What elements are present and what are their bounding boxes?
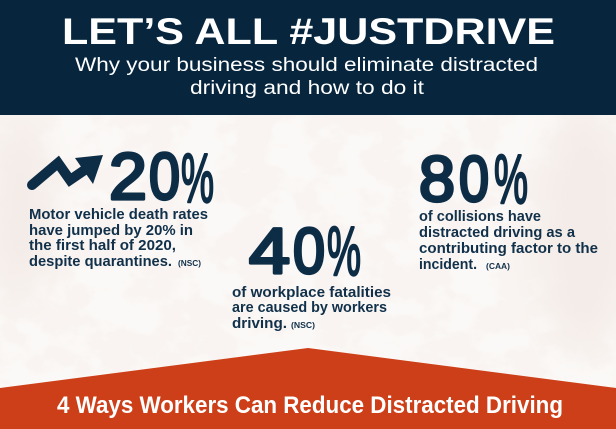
- number 20%: %: [181, 139, 214, 217]
- description: [419, 208, 598, 273]
- description: of workplace fatalities: [232, 284, 391, 301]
- description: incident.: [419, 256, 477, 273]
- description: driving.: [232, 315, 287, 332]
- description: the first half of 2020,: [29, 237, 176, 254]
- description: (NSC): [178, 258, 201, 268]
- number 20%: 2: [109, 139, 147, 213]
- number 40%: %: [327, 212, 361, 290]
- description: of collisions have: [419, 208, 541, 225]
- description: distracted driving as a: [419, 224, 576, 241]
- number 80%: 8: [419, 143, 455, 215]
- stat: 40 percent: [232, 212, 391, 332]
- number 80%: 0: [459, 143, 489, 215]
- description: contributing factor to the: [419, 240, 598, 257]
- stat: 20 percent: [29, 139, 214, 270]
- subtitle: [75, 55, 538, 99]
- icon: rising arrow: [32, 155, 103, 185]
- description: (CAA): [486, 261, 510, 271]
- number 20%: [109, 139, 214, 217]
- number 40%: [249, 212, 361, 290]
- orange section banner: [0, 348, 616, 429]
- description: [29, 206, 208, 270]
- mottled background texture: [0, 110, 616, 405]
- title: LET’S ALL #JUSTDRIVE: [62, 11, 555, 52]
- description: [232, 284, 391, 332]
- description: (NSC): [291, 320, 315, 330]
- subtitle: driving and how to do it: [190, 78, 425, 99]
- number 80%: [419, 140, 528, 218]
- description: despite quarantines.: [29, 253, 172, 270]
- number 80%: %: [494, 140, 528, 218]
- description: have jumped by 20% in: [29, 222, 193, 239]
- header banner: [0, 0, 616, 115]
- description: Motor vehicle death rates: [29, 206, 208, 223]
- stat: 80 percent: [419, 140, 598, 273]
- description: are caused by workers: [232, 299, 387, 316]
- subtitle: Why your business should eliminate distracted: [75, 55, 538, 76]
- number 20%: 0: [149, 139, 180, 213]
- number 40%: 4: [249, 215, 290, 287]
- number 40%: 0: [293, 215, 325, 287]
- banner heading: 4 Ways Workers Can Reduce Distracted Driving: [57, 392, 563, 419]
